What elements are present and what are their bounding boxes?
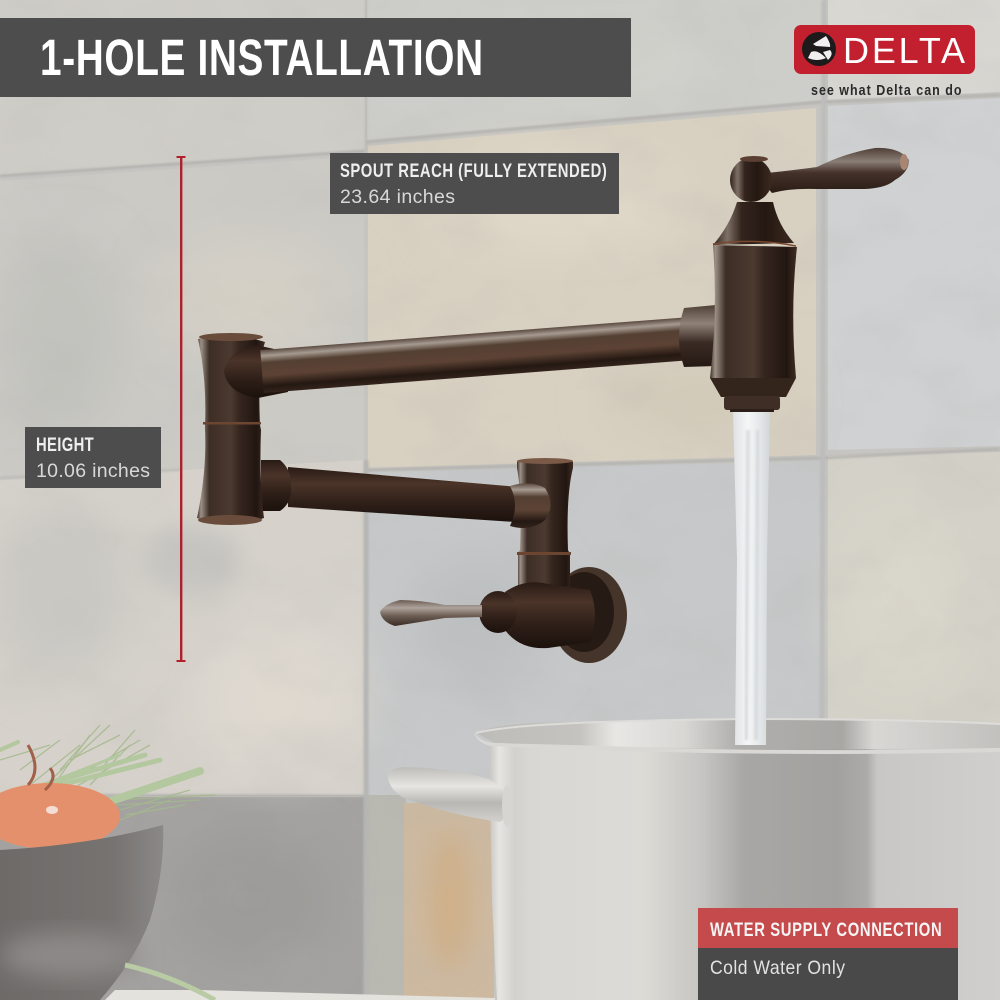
tile: lower right — [828, 452, 1000, 730]
tomato — [0, 783, 120, 849]
cooking pot — [388, 719, 1000, 1000]
title banner — [0, 18, 631, 97]
faucet: upper arm — [260, 317, 692, 393]
callout: height — [25, 427, 161, 488]
water supply heading — [698, 908, 958, 948]
callout: water supply connection: WATER SUPPLY CONNECTION — [710, 919, 942, 940]
valve body — [505, 582, 595, 648]
tile: top centre — [367, 0, 825, 140]
tile: lower centre — [368, 460, 820, 810]
vertical valve stem — [517, 459, 573, 592]
faucet: spout body — [679, 148, 909, 412]
countertop — [105, 990, 495, 1000]
valve knob — [479, 591, 517, 633]
callout: spout reach — [330, 153, 619, 214]
upper elbow — [224, 345, 288, 398]
lower arm collar — [261, 460, 291, 511]
handle end plate — [502, 785, 512, 827]
pot body — [489, 743, 1000, 1000]
tile: right blue-grey — [828, 98, 1000, 450]
scallion — [125, 965, 215, 1000]
spout base rings — [710, 378, 796, 397]
right collar — [679, 305, 716, 367]
faucet: lower arm — [261, 460, 550, 528]
tile: centre tan — [368, 108, 816, 468]
bowl — [0, 825, 163, 1000]
callout: water supply connection — [698, 908, 958, 1000]
logo badge — [794, 25, 975, 74]
tile: top right — [828, 0, 1000, 100]
lower elbow — [510, 483, 550, 528]
water stream — [733, 410, 770, 745]
tile: top left — [0, 0, 365, 175]
logo tagline: see what Delta can do — [811, 82, 961, 98]
water supply value: Cold Water Only — [710, 956, 846, 978]
spout shoulder — [713, 202, 794, 245]
title: 1-HOLE INSTALLATION — [40, 29, 483, 86]
tile: bottom dark slate — [0, 797, 366, 1000]
lever tip — [900, 154, 908, 170]
lower lever — [380, 600, 482, 626]
handle hub — [730, 158, 772, 202]
logo wordmark: DELTA — [843, 30, 965, 71]
upper lever — [765, 148, 909, 193]
logo: Delta — [794, 25, 975, 98]
joint column — [197, 336, 265, 524]
lower pipe — [288, 467, 530, 523]
pot handle — [388, 767, 512, 822]
spout barrel — [710, 245, 797, 378]
tile: lower left — [0, 460, 366, 795]
height value: 10.06 inches — [36, 460, 150, 482]
spout reach label: SPOUT REACH (FULLY EXTENDED) — [340, 160, 607, 181]
pot rim — [474, 732, 1000, 754]
fennel fronds — [0, 725, 215, 820]
height label: HEIGHT — [36, 434, 94, 455]
tile: mid left — [0, 156, 364, 480]
tile: bottom left grey slate — [366, 795, 406, 1000]
fennel stalks — [0, 742, 200, 802]
escutcheon — [551, 567, 627, 663]
logo emblem — [802, 32, 836, 66]
decor: fennel and tomato in bowl — [0, 725, 495, 1000]
tile: bottom tan slate — [404, 803, 494, 1000]
faucet: swing joint — [197, 333, 288, 525]
spout reach value: 23.64 inches — [340, 186, 455, 208]
height dimension line — [176, 156, 186, 662]
faucet: wall mount and lower valve — [380, 458, 627, 663]
pot inner wall — [476, 720, 1000, 750]
